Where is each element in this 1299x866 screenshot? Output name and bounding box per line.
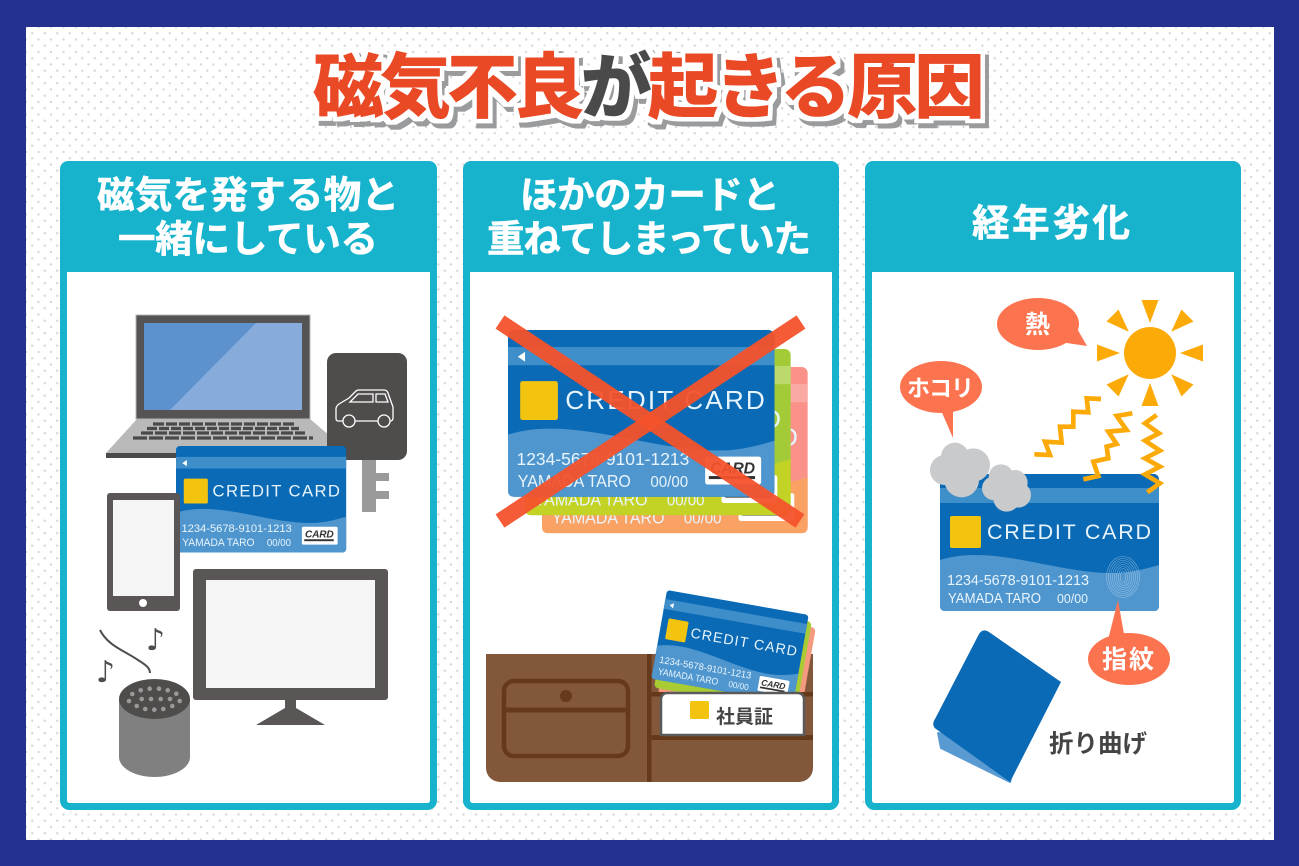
credit card: YAMADA TARO <box>948 591 1041 607</box>
orange card: CREDIT CARD <box>599 422 798 452</box>
cards in wallet: CARD <box>761 677 786 691</box>
icon: monitor <box>193 569 388 725</box>
icon: smart speaker with music notes: ♪ <box>146 623 165 658</box>
blue card <box>508 330 775 497</box>
blue card: CARD <box>710 461 755 478</box>
cards in wallet: CREDIT CARD <box>689 625 798 659</box>
speech bubble: fingerprint <box>1088 600 1170 685</box>
heading: ほかのカードと <box>520 174 780 216</box>
credit card: YAMADA TARO <box>182 537 255 549</box>
panel header <box>60 161 437 272</box>
heading <box>97 174 399 260</box>
blue card: CREDIT CARD <box>565 385 765 415</box>
credit card: CARD <box>305 530 334 541</box>
cards in wallet: 1234-5678-9101-1213 <box>658 655 752 682</box>
panel frame <box>868 164 1238 806</box>
icon: tablet <box>107 493 180 611</box>
dust cloud <box>930 443 1031 512</box>
green card: CREDIT CARD <box>582 404 781 434</box>
credit card: 00/00 <box>267 538 291 549</box>
speech bubble: dust <box>900 361 982 438</box>
employee ID badge: 社員証 <box>716 706 773 728</box>
speech bubble: dust: ホコリ <box>907 375 974 401</box>
panel frame <box>64 164 434 806</box>
icon: smart speaker with music notes: ♪ <box>96 655 115 690</box>
icon: smart speaker with music notes <box>96 623 190 777</box>
panel: stacked cards <box>463 161 839 806</box>
folded card <box>933 630 1061 782</box>
panel header <box>865 161 1241 272</box>
orange card: YAMADA TARO <box>552 507 665 527</box>
fingerprint <box>1106 556 1140 598</box>
heading: 磁気を発する物と <box>97 174 399 216</box>
panel: aging <box>865 161 1241 806</box>
icon: laptop <box>106 315 350 458</box>
title: 磁気不良が起きる原因 <box>313 49 985 128</box>
green card: YAMADA TARO <box>535 489 648 509</box>
icon: sun <box>1097 300 1203 406</box>
credit card: 1234-5678-9101-1213 <box>947 573 1089 589</box>
blue card: 00/00 <box>650 474 688 491</box>
wallet <box>486 590 816 782</box>
heading: 重ねてしまっていた <box>487 218 811 260</box>
speech bubble: fingerprint: 指紋 <box>1102 646 1154 674</box>
speech bubble: heat <box>997 298 1087 350</box>
heat rays <box>1034 398 1160 492</box>
red cross <box>500 322 801 521</box>
label: bending: 折り曲げ <box>1049 730 1148 758</box>
panel header <box>463 161 839 272</box>
heading: 経年劣化 <box>972 202 1130 244</box>
blue card: YAMADA TARO <box>518 471 631 491</box>
orange card: 00/00 <box>684 510 722 527</box>
credit card <box>940 474 1159 611</box>
cards in wallet: 00/00 <box>728 679 750 692</box>
blue card: 1234-5678-9101-1213 <box>517 449 690 469</box>
cards in wallet <box>652 590 816 692</box>
cards in wallet: YAMADA TARO <box>657 666 719 688</box>
orange card <box>542 367 808 533</box>
heading: 一緒にしている <box>118 218 378 260</box>
credit card: 00/00 <box>1057 591 1088 606</box>
credit card <box>176 446 346 552</box>
credit card: 1234-5678-9101-1213 <box>181 523 292 535</box>
panel frame <box>466 164 836 806</box>
panel: magnetic objects <box>60 161 437 806</box>
credit card: CREDIT CARD <box>213 482 340 501</box>
employee ID badge <box>661 693 804 735</box>
speech bubble: heat: 熱 <box>1025 311 1050 339</box>
icon: car key <box>327 353 407 512</box>
green card <box>525 349 791 515</box>
green card: 00/00 <box>667 492 705 509</box>
credit card: CREDIT CARD <box>987 520 1151 544</box>
heading <box>487 174 811 260</box>
